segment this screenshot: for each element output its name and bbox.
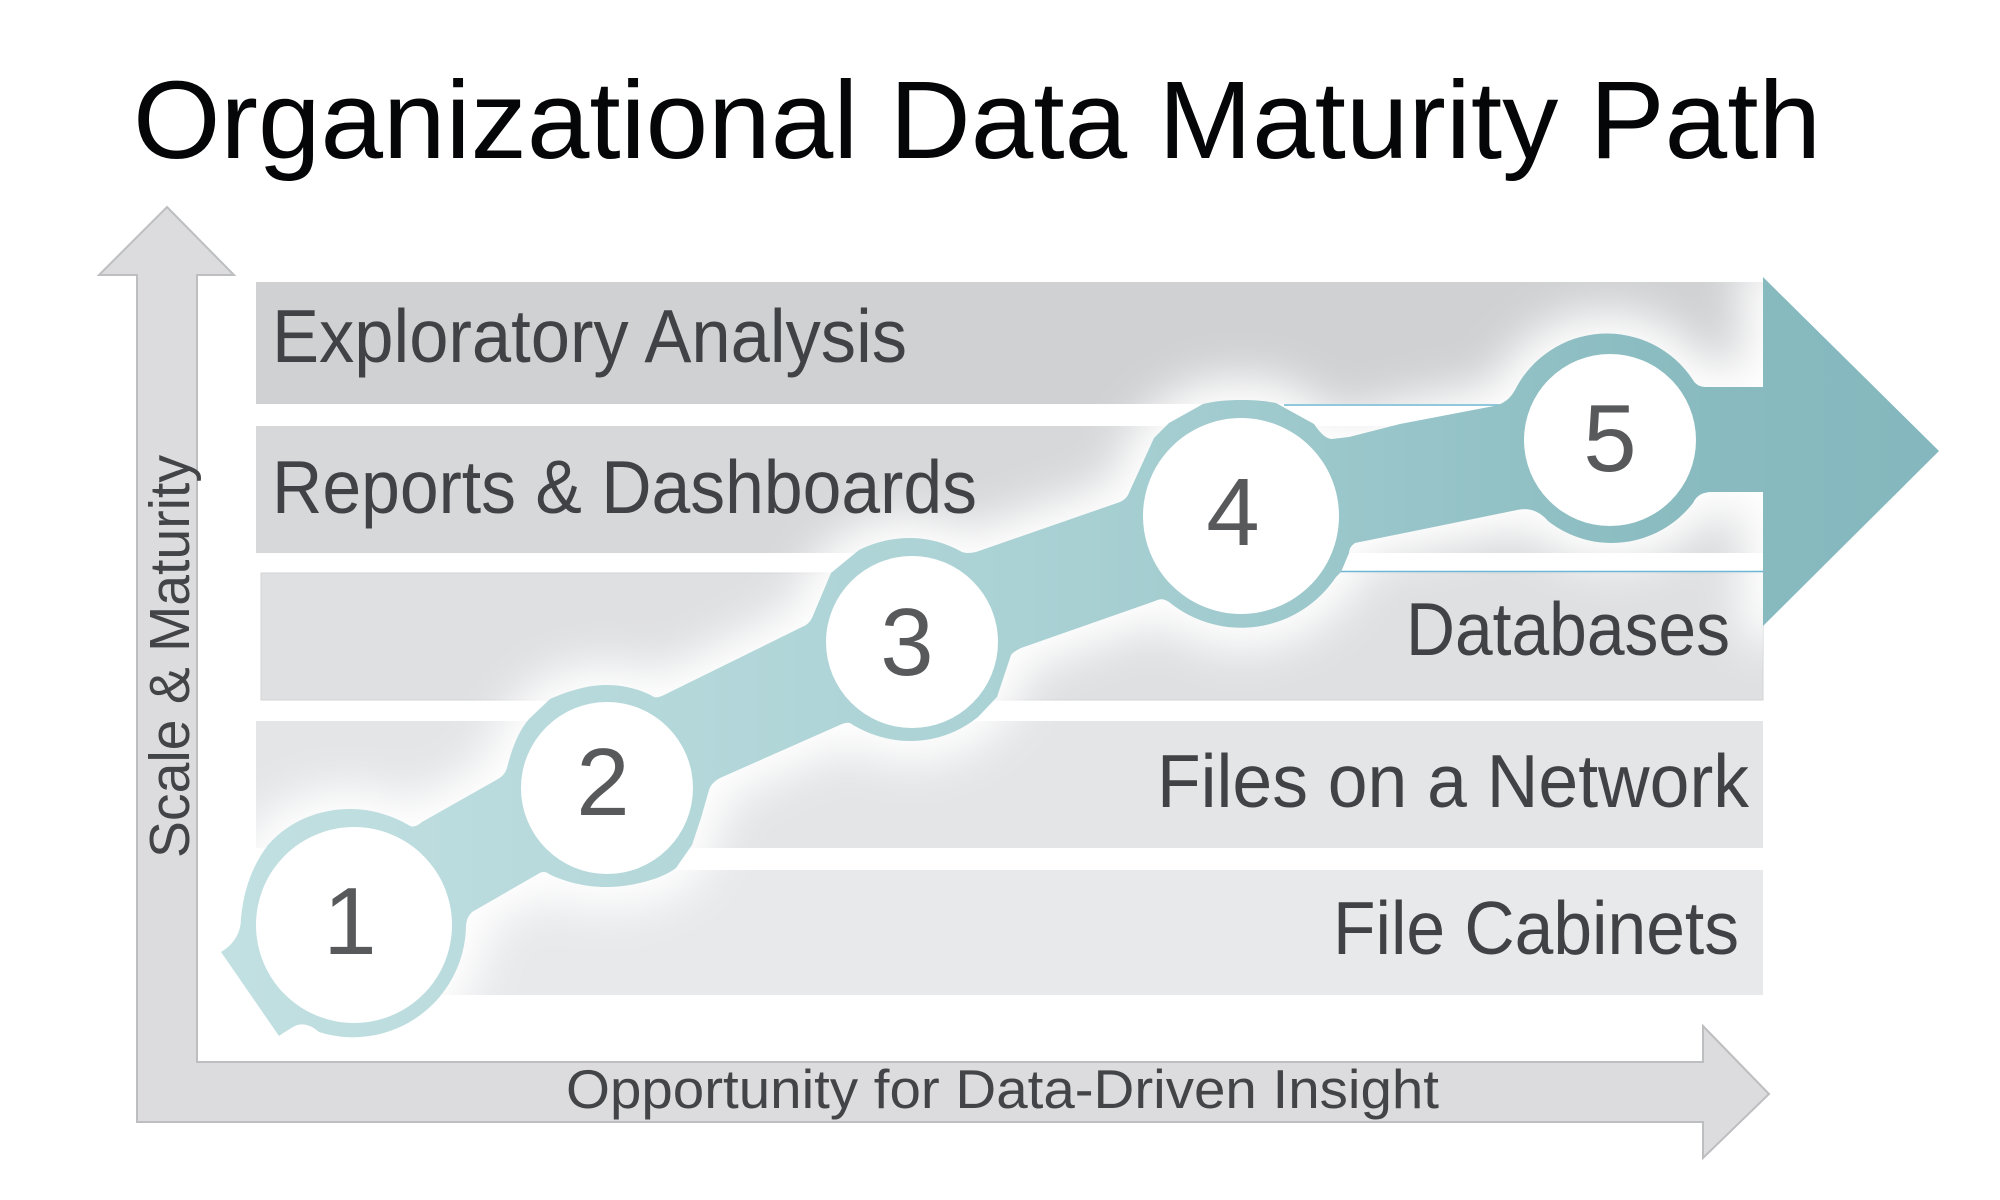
step 1 [256, 827, 452, 1023]
maturity ribbon arrow [221, 277, 1939, 1037]
step 3 [826, 556, 998, 728]
label: files on a network: Files on a Network [1157, 739, 1749, 823]
band: exploratory analysis [256, 282, 1763, 404]
axes arrow: L-shaped up and right [99, 207, 1769, 1158]
number 3: 3 [880, 589, 934, 696]
circle 2 [521, 702, 693, 874]
band labels [272, 294, 1749, 970]
circle 3 [826, 556, 998, 728]
step 2 [521, 702, 693, 874]
label: exploratory analysis: Exploratory Analysis [272, 294, 907, 378]
thin highlight lines [1284, 405, 1763, 572]
band: file cabinets [256, 870, 1763, 995]
stage bands [256, 282, 1763, 995]
number 4: 4 [1206, 459, 1260, 566]
axis label: horizontal: Opportunity for Data-Driven Insight [566, 1058, 1439, 1120]
label: reports and dashboards: Reports & Dashboards [272, 445, 977, 529]
band: reports and dashboards [256, 426, 1763, 553]
band: databases [261, 573, 1763, 700]
axis label: vertical: Scale & Maturity [138, 455, 202, 858]
number 2: 2 [576, 729, 630, 836]
circle 5 [1524, 354, 1696, 526]
label: file cabinets: File Cabinets [1333, 886, 1739, 970]
circle 4 [1143, 418, 1339, 614]
number 1: 1 [323, 868, 377, 975]
circle 1 [256, 827, 452, 1023]
title: Organizational Data Maturity Path [133, 59, 1821, 182]
step 4 [1143, 418, 1339, 614]
step 5 [1524, 354, 1696, 526]
white glow behind ribbon [256, 282, 1763, 995]
number 5: 5 [1583, 385, 1637, 492]
label: databases: Databases [1406, 587, 1730, 671]
band: files on a network [256, 721, 1763, 848]
